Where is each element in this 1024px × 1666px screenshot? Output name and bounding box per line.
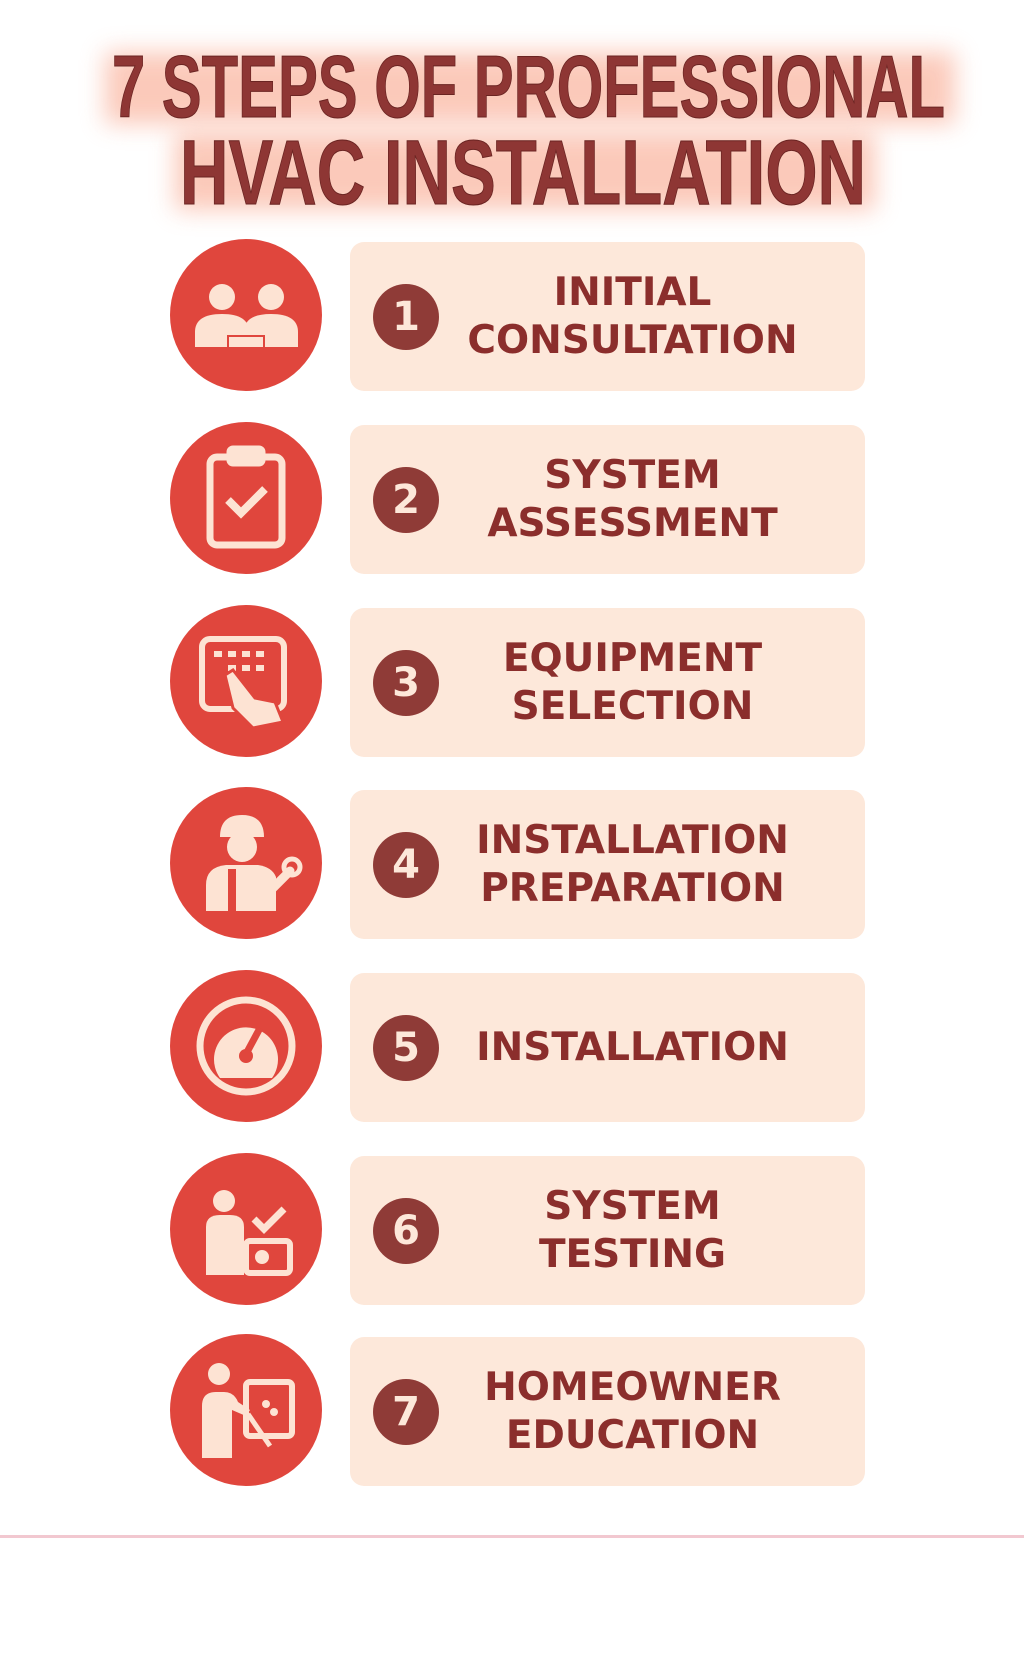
- step 1: CONSULTATION: [467, 318, 798, 362]
- step 4: PREPARATION: [480, 866, 785, 910]
- step 3: [350, 608, 865, 757]
- step 4: INSTALLATION: [476, 818, 789, 862]
- icon: testing: [170, 1153, 322, 1305]
- icon: gauge: [170, 970, 322, 1122]
- step 7: 7: [392, 1389, 420, 1435]
- step 4: [350, 790, 865, 939]
- title: [92, 38, 968, 224]
- step 4: 4: [392, 842, 420, 888]
- icon: equipment selection: [170, 605, 322, 757]
- step 2: [350, 425, 865, 574]
- step 7: [350, 1337, 865, 1486]
- icon: technician: [170, 787, 322, 939]
- step 1: INITIAL: [554, 270, 711, 314]
- icon: education: [170, 1334, 322, 1486]
- step 5: INSTALLATION: [476, 1024, 789, 1070]
- step 7: HOMEOWNER: [484, 1364, 781, 1410]
- step 2: ASSESSMENT: [487, 500, 778, 546]
- step 3: EQUIPMENT: [503, 636, 762, 680]
- step 3: 3: [392, 660, 420, 706]
- step 2: SYSTEM: [544, 452, 721, 498]
- step 6: TESTING: [539, 1232, 726, 1276]
- step 6: [350, 1156, 865, 1305]
- step 5: 5: [392, 1025, 420, 1071]
- step 1: 1: [392, 294, 420, 340]
- step 7: EDUCATION: [506, 1412, 759, 1458]
- step 2: 2: [392, 477, 420, 523]
- step 6: 6: [392, 1208, 420, 1254]
- icon: consultation: [170, 239, 322, 391]
- step 5: [350, 973, 865, 1122]
- icon: clipboard: [170, 422, 322, 574]
- step 3: SELECTION: [512, 684, 753, 728]
- step 1: [350, 242, 865, 391]
- step 6: SYSTEM: [544, 1184, 721, 1228]
